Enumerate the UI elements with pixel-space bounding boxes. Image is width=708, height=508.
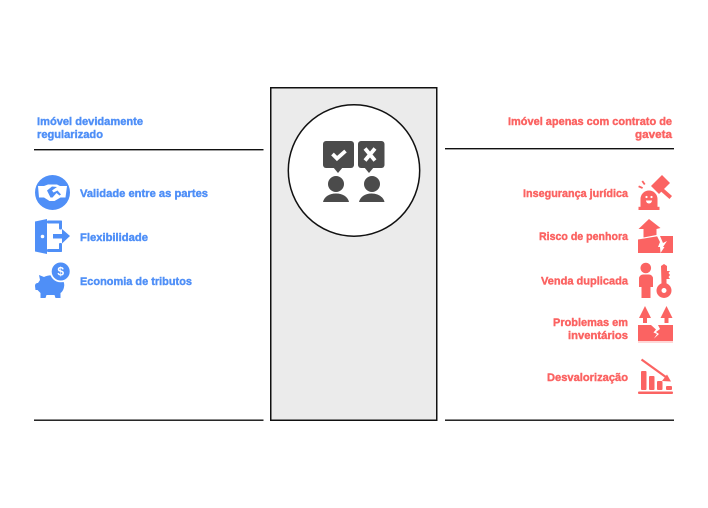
heading: left: Imóvel devidamente bbox=[37, 116, 143, 128]
heading: right: gaveta bbox=[635, 129, 673, 141]
icon: handshake bbox=[35, 175, 70, 210]
label: insegurança: Insegurança jurídica bbox=[523, 188, 629, 200]
icon: gavel and siren bbox=[638, 175, 672, 210]
heading: left: regularizado bbox=[37, 129, 103, 141]
icon: people with approve and reject speech bubbles bbox=[288, 105, 420, 236]
panel: centre column bbox=[271, 88, 437, 420]
icon: arrows over split ground bbox=[638, 306, 673, 342]
heading: right: Imóvel apenas com contrato de bbox=[508, 116, 672, 128]
label: desvalorização: Desvalorização bbox=[547, 372, 628, 384]
label: problemas: Problemas em bbox=[553, 317, 628, 329]
label: flexibilidade: Flexibilidade bbox=[80, 232, 148, 244]
icon: person and key bbox=[639, 263, 672, 298]
icon: door with exit arrow bbox=[35, 219, 70, 254]
label: validade: Validade entre as partes bbox=[80, 188, 208, 200]
icon: piggy bank with coin bbox=[35, 261, 72, 298]
icon: house over cracked ground bbox=[638, 219, 673, 253]
right panel: drawer contract bbox=[445, 116, 674, 421]
label: economia: Economia de tributos bbox=[80, 276, 192, 288]
label: risco: Risco de penhora bbox=[539, 231, 629, 243]
label: venda: Venda duplicada bbox=[541, 276, 629, 288]
label: problemas: inventários bbox=[568, 330, 628, 342]
left panel: regularised property bbox=[34, 116, 264, 421]
icon: piggy bank with coin: $ bbox=[57, 265, 64, 279]
icon: falling bar chart bbox=[638, 360, 673, 394]
